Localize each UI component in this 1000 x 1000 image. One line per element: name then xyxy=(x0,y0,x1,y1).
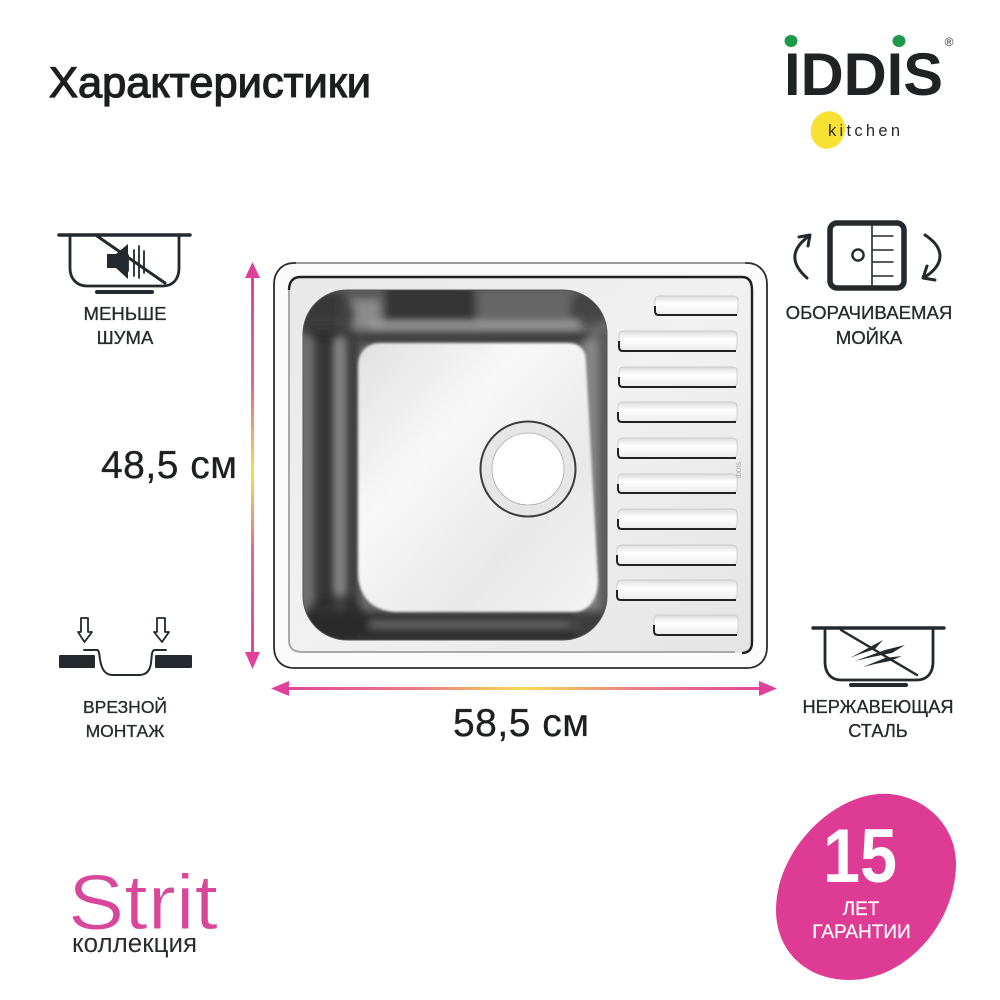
sink: bowl walls xyxy=(304,290,606,640)
dimension arrow: width xyxy=(271,681,777,696)
warranty badge: 15 xyxy=(823,814,897,899)
logo: IDDIS kitchen: IDDIS xyxy=(784,41,943,108)
sink: bowl edge xyxy=(303,290,607,640)
collection name: Strit xyxy=(68,858,218,946)
label: less noise: ШУМА xyxy=(97,327,154,348)
sink: deck plate xyxy=(289,277,752,653)
icon: reversible sink xyxy=(795,223,940,288)
collection name: коллекция xyxy=(72,928,197,958)
dimension: height value: 48,5 см xyxy=(101,444,237,487)
title: Характеристики xyxy=(49,59,371,107)
sink: drainboard ribs xyxy=(617,296,738,635)
warranty badge: ГАРАНТИИ xyxy=(812,922,911,943)
label: inset mounting: ВРЕЗНОЙ xyxy=(83,696,167,717)
label: reversible sink: МОЙКА xyxy=(836,327,903,348)
sink: drain xyxy=(480,422,576,516)
sink: outer rim xyxy=(274,262,768,668)
warranty badge: ЛЕТ xyxy=(843,899,880,920)
sink photo xyxy=(274,262,768,668)
label: reversible sink: ОБОРАЧИВАЕМАЯ xyxy=(786,302,952,323)
logo: IDDIS kitchen xyxy=(784,35,954,154)
label: stainless steel: СТАЛЬ xyxy=(848,721,908,741)
label: less noise: МЕНЬШЕ xyxy=(84,303,166,324)
logo: IDDIS kitchen: kitchen xyxy=(828,122,900,140)
dimension: width value: 58,5 см xyxy=(453,702,589,745)
warranty badge xyxy=(776,794,956,980)
dimension arrow: height xyxy=(245,262,260,669)
label: stainless steel: НЕРЖАВЕЮЩАЯ xyxy=(802,697,954,717)
icon: stainless steel xyxy=(813,628,944,685)
label: inset mounting: МОНТАЖ xyxy=(86,721,164,741)
icon: inset mounting xyxy=(59,618,192,675)
logo: IDDIS kitchen: ® xyxy=(945,35,954,49)
sink: bowl floor xyxy=(358,343,598,612)
icon: less noise xyxy=(59,235,190,292)
sink: embossed mark: IDDIS xyxy=(737,462,743,478)
